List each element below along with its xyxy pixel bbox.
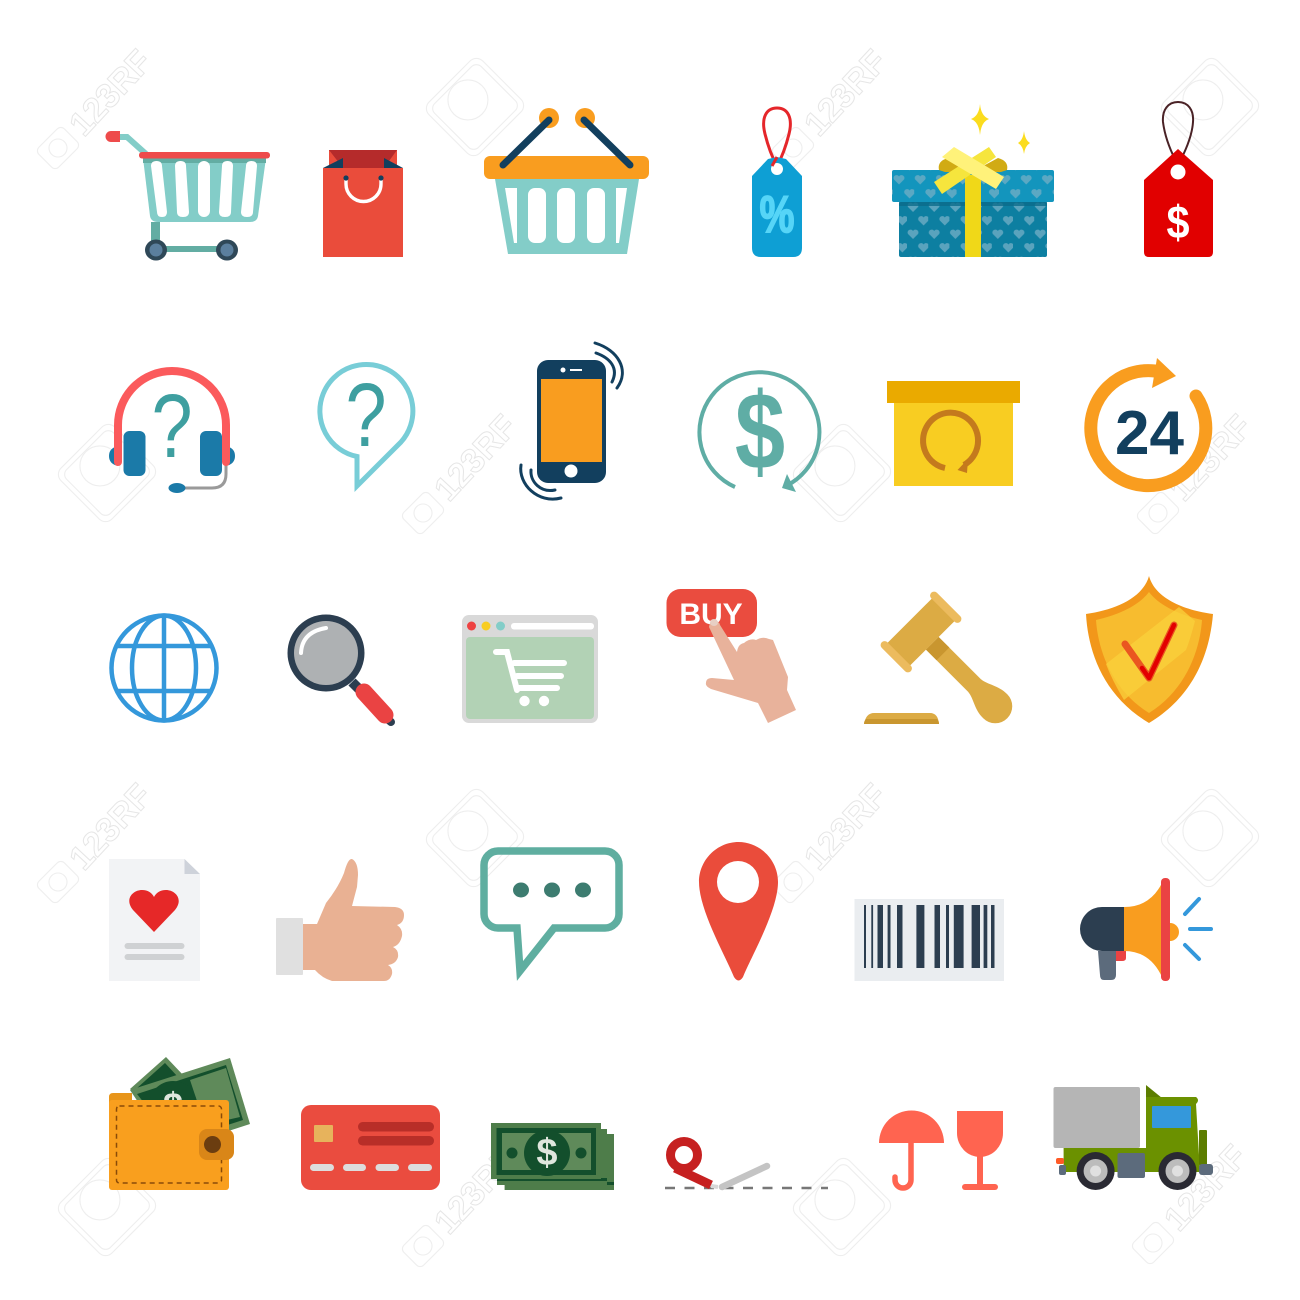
watermark: 123RF stamps: 123RF (1157, 1138, 1254, 1238)
watermark: 123RF stamps: 123RF (427, 1141, 524, 1241)
watermark: 123RF stamps: 123RF (797, 43, 894, 143)
pointing hand (706, 621, 796, 723)
watermark: 123RF stamps: 123RF (1162, 408, 1259, 508)
icon: location pin (699, 842, 778, 980)
icon: route pin with dashed line (665, 1142, 828, 1188)
icon: delivery truck (1054, 1085, 1213, 1190)
icon: browser window with cart (462, 615, 598, 723)
icon: shield with check (1086, 576, 1213, 723)
icon: magnifying glass (288, 614, 391, 722)
sparkle stars (971, 104, 1030, 154)
icon: dollar price tag (1144, 102, 1213, 257)
watermark: 123RF stamps: 123RF (797, 777, 894, 877)
icon: percent price tag (752, 108, 802, 257)
icon: megaphone (1080, 878, 1211, 981)
icon: gift box with bow (892, 104, 1054, 257)
icon: dollar refund circle (699, 371, 819, 493)
icon: umbrella and fragile glass (879, 1110, 1003, 1190)
icon: shopping cart (106, 131, 270, 260)
icon: wallet with banknotes (109, 1057, 250, 1190)
icon: vibrating smartphone (521, 343, 622, 499)
watermark: 123RF stamps: 123RF (62, 43, 159, 143)
dollar on banknote: $ (163, 1085, 183, 1126)
icon: stack of banknotes (491, 1123, 614, 1190)
icon: chat bubble with dots (484, 851, 619, 971)
icon: 24 hour service (1091, 358, 1206, 486)
buy label: BUY (679, 598, 743, 631)
percent symbol: % (760, 186, 794, 243)
icon: auction gavel (864, 590, 1035, 746)
question mark: ? (345, 366, 387, 466)
question mark: ? (151, 377, 193, 477)
icon: support headset (109, 371, 235, 493)
icon: buy button with hand (666, 589, 796, 723)
dollar symbol: $ (735, 371, 785, 493)
icon: document with heart (109, 859, 200, 981)
icon: barcode (854, 899, 1004, 981)
number 24: 24 (1115, 399, 1184, 468)
watermark: 123RF stamps: 123RF (62, 777, 159, 877)
icon: credit card (301, 1105, 440, 1190)
dollar symbol: $ (536, 1132, 558, 1174)
dollar symbol: $ (1166, 197, 1190, 249)
icon: shopping basket (484, 108, 649, 254)
icon: shopping bag (323, 150, 403, 257)
icon: globe (112, 615, 216, 721)
watermark: 123RF stamps: 123RF (427, 408, 524, 508)
icon: question speech bubble (320, 364, 413, 486)
icon: return box (887, 381, 1020, 486)
icon: thumbs up (276, 859, 404, 981)
